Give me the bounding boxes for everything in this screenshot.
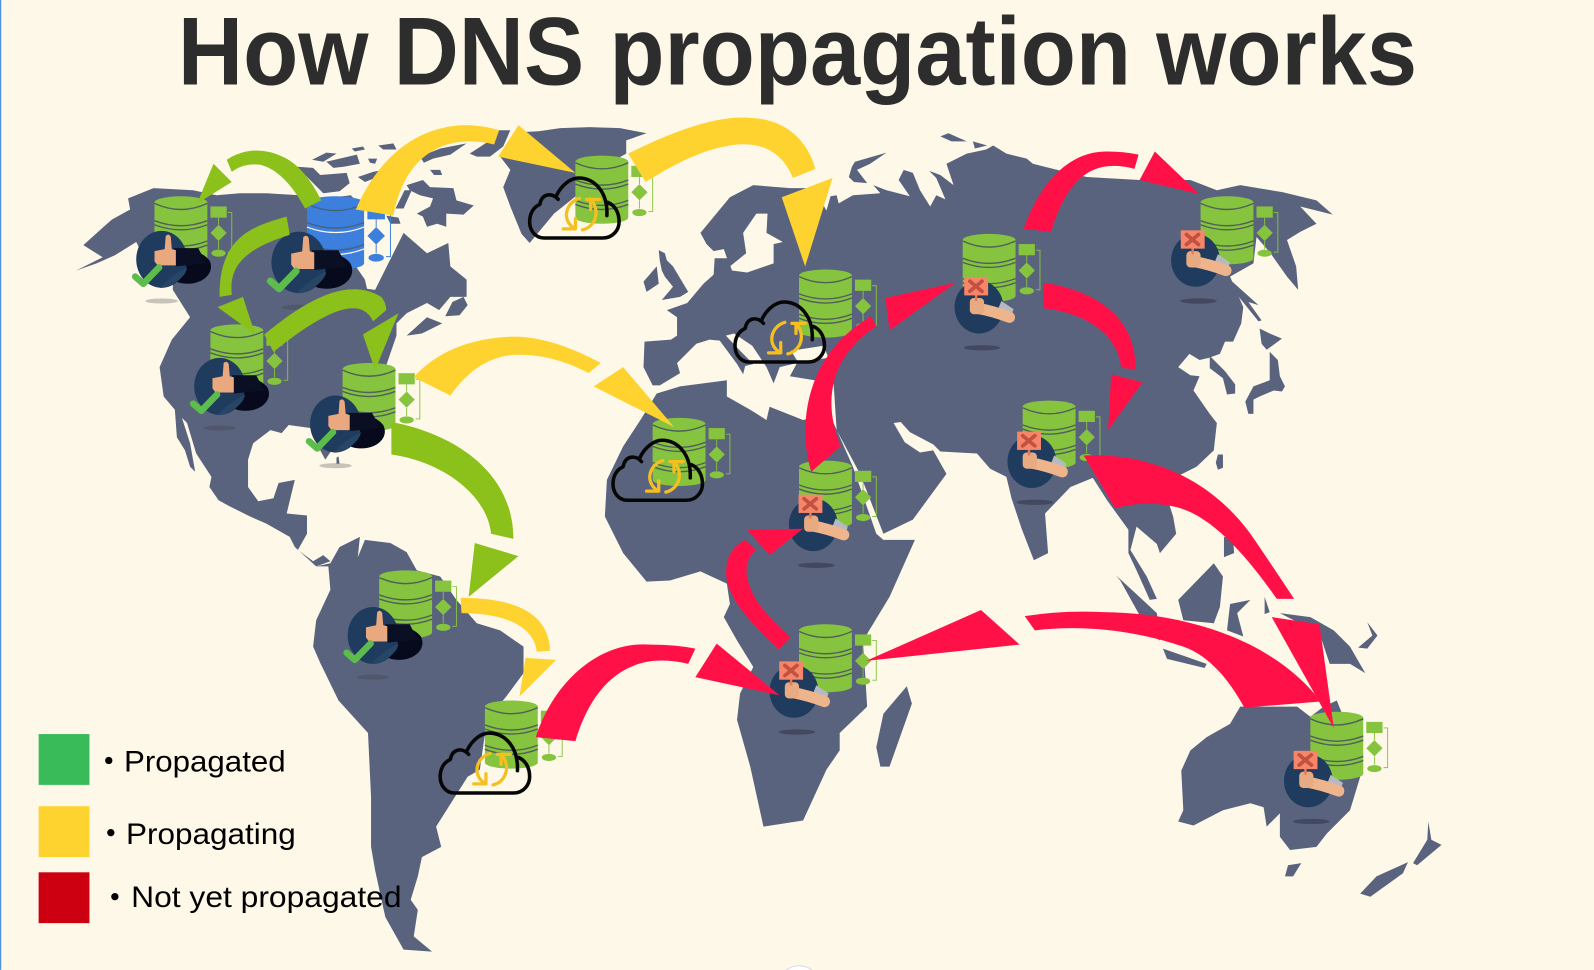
map: Africa (605, 380, 915, 827)
legend item: propagating (39, 806, 296, 857)
server: Central Africa (799, 624, 876, 692)
map: Southeast Asia islands (1116, 563, 1377, 673)
server: northern South America (379, 570, 456, 639)
green arrows (197, 151, 518, 597)
icon: thumbs up eastern US (309, 396, 385, 468)
icon: thumbs up South America (347, 607, 422, 680)
server: East Africa (799, 461, 876, 529)
legend item: not yet propagated: Not yet propagated (131, 881, 402, 914)
icon: sign East Russia (1171, 230, 1230, 304)
bottom marker (777, 966, 821, 970)
icon: cloud Greenland (530, 178, 619, 238)
map: South America (313, 537, 524, 952)
yellow arrows (356, 118, 833, 696)
map: Madagascar (876, 686, 912, 767)
legend item: propagated (39, 734, 286, 785)
arrow: Central Africa to East Africa (726, 529, 803, 650)
server: Australia (1310, 712, 1388, 780)
servers: propagating (485, 156, 876, 769)
map: Novaya Zemlya, Severnaya Zemlya, Japan, Korea and Pacific islands (849, 133, 1285, 557)
arrow: Canada to Alaska (197, 151, 321, 208)
server: Alaska (155, 196, 232, 264)
arrow: eastern US to West Africa (414, 337, 674, 427)
icon: thumbs up western US (193, 358, 269, 431)
map: Greenland (500, 127, 647, 243)
map: Tasmania and New Zealand (1285, 821, 1442, 897)
server: eastern US (343, 363, 420, 431)
icon: sign East Africa (789, 495, 848, 568)
arrow: South America to Central Africa (536, 644, 780, 741)
icon: sign India (1007, 432, 1066, 505)
arrow: Russia to East Russia (1024, 152, 1200, 232)
world map (76, 127, 1442, 952)
map: Arctic islands (297, 130, 510, 464)
arrow: Russia to India (1043, 283, 1143, 430)
icon: sign Russia (955, 277, 1014, 350)
server: Europe (799, 269, 876, 338)
icon: sign Central Africa (770, 661, 829, 735)
left edge line (0, 0, 1, 970)
map: Australia (1178, 701, 1363, 850)
thumbs-up status icons (135, 231, 422, 680)
arrow: Canada to Greenland (356, 125, 575, 216)
server: southern South America (485, 701, 562, 769)
arrow: northern to southern South America (461, 598, 556, 696)
arrow: Australia to Central Africa (866, 610, 1321, 708)
arrow: East Africa to Russia (805, 283, 956, 472)
arrow: Canada to western US (218, 217, 290, 335)
server: India (1023, 401, 1100, 469)
red arrows (536, 152, 1334, 741)
syncing cloud icons (440, 178, 824, 793)
server: Russia (963, 234, 1040, 302)
icon: cloud Europe (735, 302, 824, 362)
legend item: not yet propagated (39, 872, 402, 923)
legend item: propagating: Propagating (126, 818, 296, 851)
arrow: western US to eastern US (264, 289, 398, 370)
map: UK and Ireland (643, 250, 688, 300)
map: Black Sea (791, 346, 829, 362)
icon: thumbs up Alaska (135, 231, 211, 304)
server: Greenland (575, 156, 653, 224)
servers: propagated (155, 196, 456, 639)
icon: cloud West Africa (613, 440, 702, 500)
server: western US (210, 324, 288, 392)
map: North America (76, 188, 467, 566)
arrow: Greenland to Europe (628, 118, 833, 266)
icon: thumbs up Canada (270, 232, 352, 310)
arrow: eastern US to South America (391, 422, 518, 597)
servers: not yet propagated (799, 196, 1388, 780)
icon: cloud South America (440, 733, 530, 793)
rejected status icons (770, 230, 1343, 824)
icon: sign Australia (1284, 751, 1343, 824)
server: West Africa (653, 418, 730, 486)
arrow: India to Australia (1084, 455, 1334, 728)
legend item: propagated: Propagated (124, 746, 286, 779)
title: How DNS propagation works (178, 0, 1417, 105)
map: Eurasia (643, 145, 1333, 600)
server: East Russia (1201, 196, 1278, 264)
legend (39, 734, 402, 923)
server: Canada origin (blue) (307, 196, 390, 270)
